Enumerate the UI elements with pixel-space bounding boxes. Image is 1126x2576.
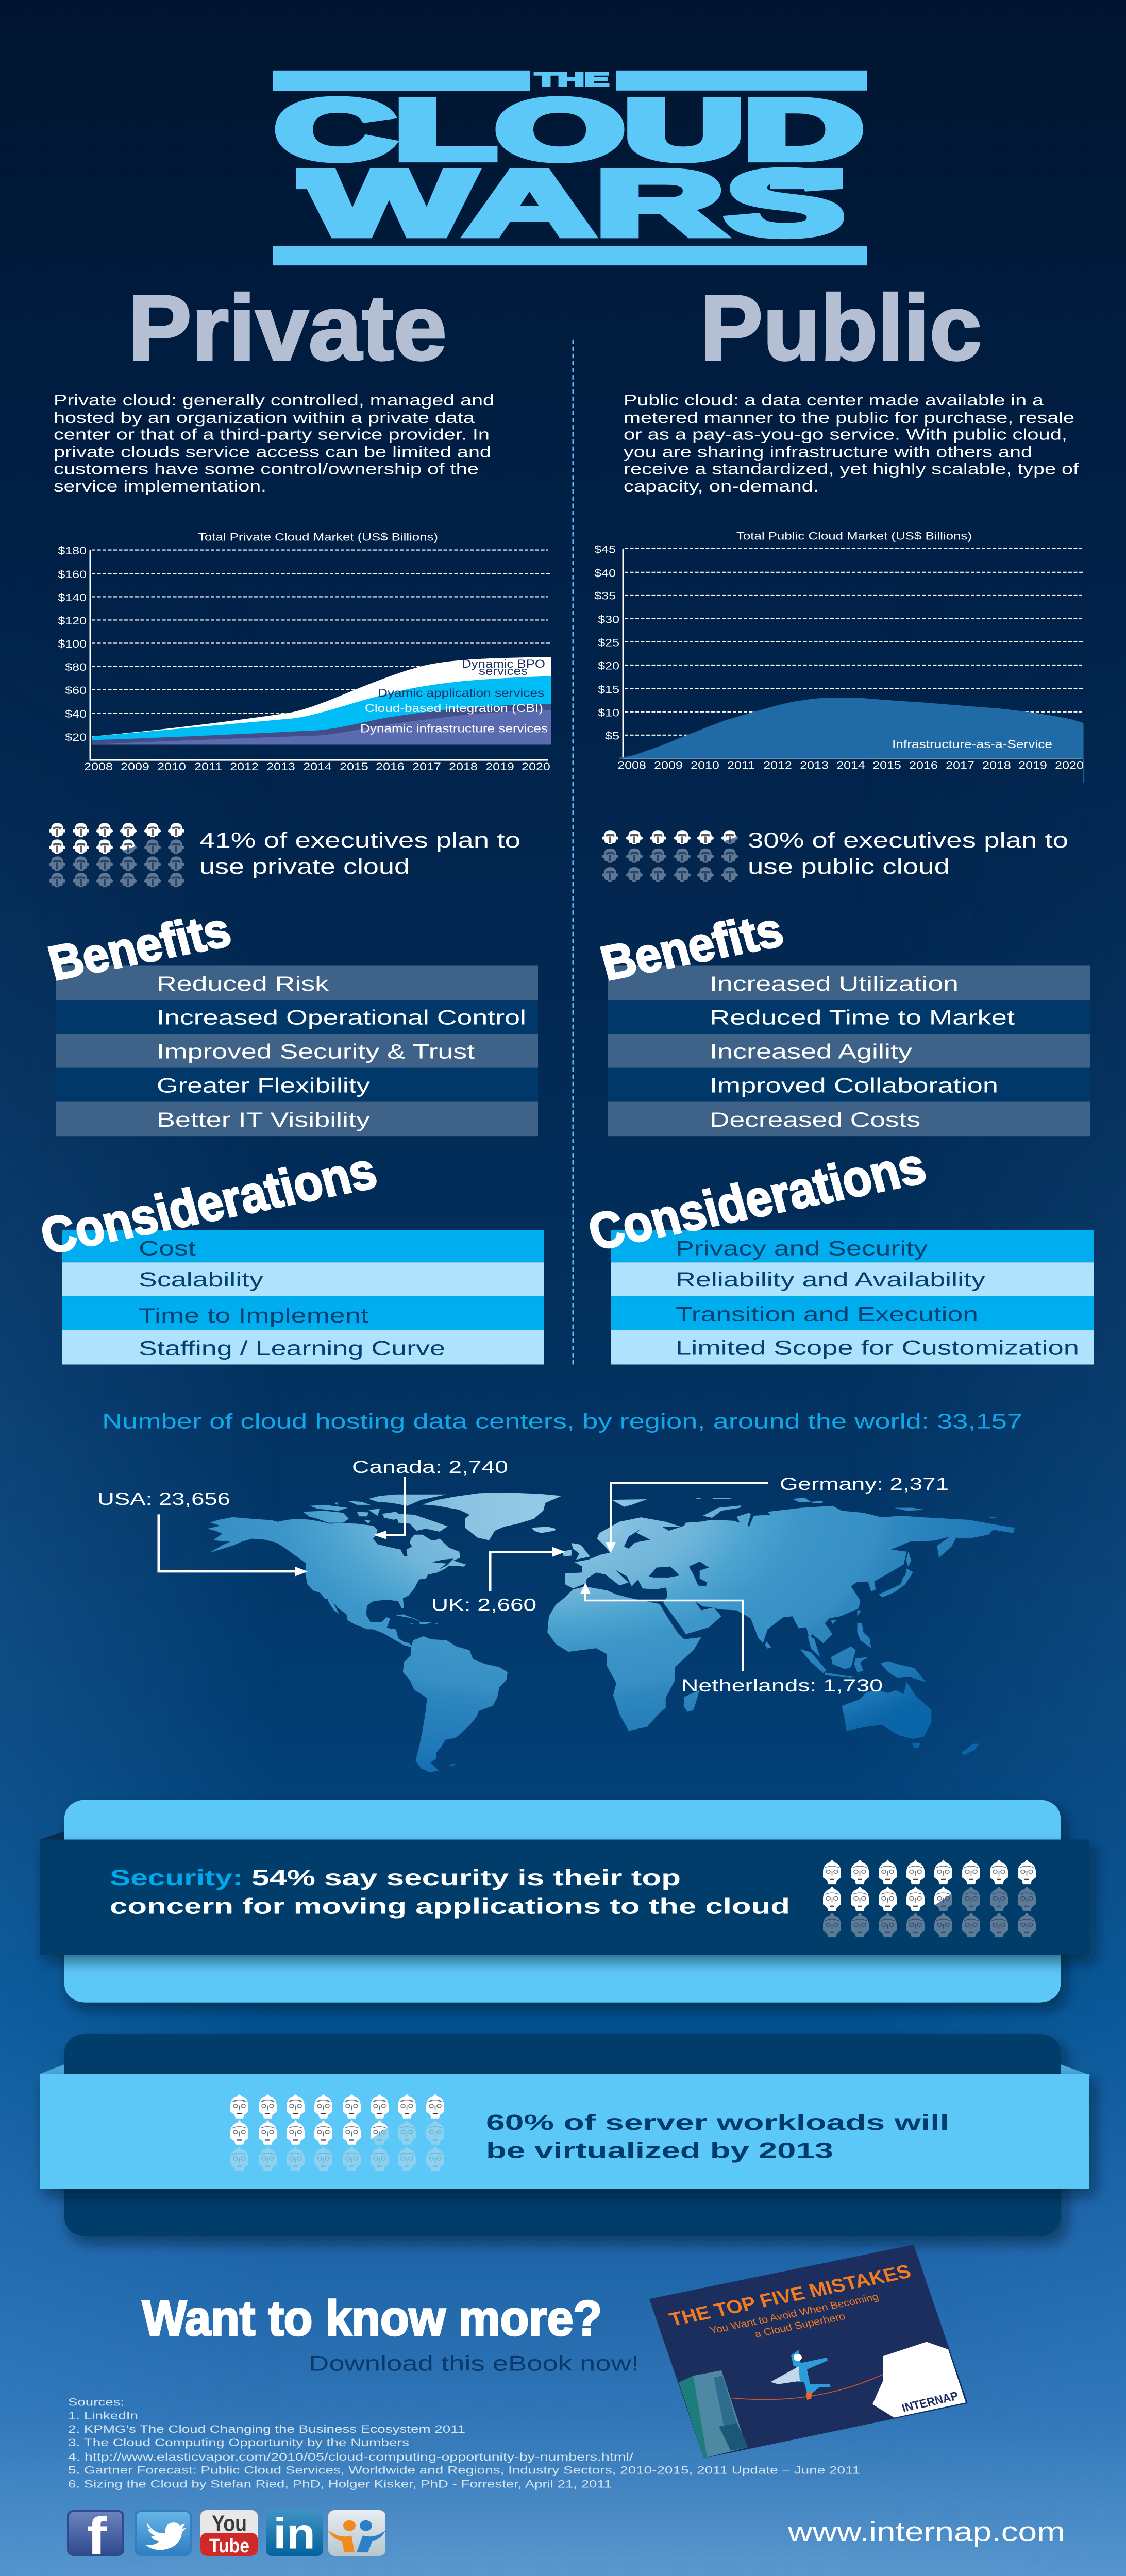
callout: Netherlands: Netherlands: 1,730 xyxy=(681,1675,883,1696)
chart: total public cloud market: 2017 xyxy=(946,759,974,771)
chart: total private cloud market: $140 xyxy=(58,591,87,604)
chart: total public cloud market: $40 xyxy=(594,567,616,579)
callout: Germany: Germany: 2,371 xyxy=(780,1473,949,1494)
chart: total public cloud market: 2015 xyxy=(872,759,901,771)
heading: public considerations: Considerations xyxy=(582,1137,932,1261)
chart: total public cloud market: 2014 xyxy=(836,759,865,771)
chart: total public cloud market xyxy=(594,530,1084,783)
panel: security xyxy=(40,1800,1089,2003)
text: internap brand: INTERNAP xyxy=(900,2389,960,2415)
text block: private cloud definition: service implementation. xyxy=(54,477,266,495)
chart: total private cloud market: $100 xyxy=(58,638,87,650)
stat: 30 percent public cloud: use public cloud xyxy=(748,854,950,878)
panel: public considerations: Limited Scope for Customization xyxy=(676,1336,1079,1360)
text block: public cloud definition: metered manner to the public for purchase, resale xyxy=(624,409,1074,426)
chart: total private cloud market: Total Private Cloud Market (US$ Billions) xyxy=(198,531,438,543)
chart: total public cloud market: $15 xyxy=(598,683,619,696)
chart: total private cloud market: $20 xyxy=(65,731,87,743)
map: eurasia, africa and australia xyxy=(547,1498,1015,1755)
icon: linkedin: in xyxy=(273,2509,315,2558)
icon grid: 54 percent droid heads xyxy=(823,1860,1036,1937)
title logo: CLOUD xyxy=(275,82,863,177)
text block: public cloud definition: you are sharing infrastructure with others and xyxy=(624,443,1032,461)
chart: total public cloud market: 2010 xyxy=(691,759,719,771)
chart: total private cloud market: 2013 xyxy=(266,760,295,773)
stat: 41 percent private cloud: use private cloud xyxy=(199,854,410,878)
text block: private cloud definition: hosted by an organization within a private data xyxy=(54,409,475,426)
text block: public cloud definition: or as a pay-as-you-go service. With public cloud, xyxy=(624,426,1067,443)
text block: private cloud definition: customers have some control/ownership of the xyxy=(54,460,479,478)
chart: total private cloud market: Dyamic application services xyxy=(378,687,544,700)
heading: private considerations: Considerations xyxy=(35,1141,382,1265)
text: virtualization statistic xyxy=(486,2110,949,2163)
chart: total private cloud market: $60 xyxy=(65,684,87,697)
chart: total public cloud market: Total Public Cloud Market (US$ Billions) xyxy=(736,530,972,542)
text block: sources xyxy=(68,2396,860,2490)
text block: sources: 6. Sizing the Cloud by Stefan Ried, PhD, Holger Kisker, PhD - Forrester, April 21, 2011 xyxy=(68,2478,612,2490)
text block: private cloud definition xyxy=(54,391,494,495)
panel: private benefits: Improved Security & Trust xyxy=(157,1040,475,1063)
chart: total public cloud market: 2018 xyxy=(982,759,1011,771)
chart: total private cloud market: 2016 xyxy=(376,760,405,773)
icon grid: 41 percent helmets xyxy=(49,823,184,887)
chart: total private cloud market: Dynamic infrastructure services xyxy=(360,722,548,735)
panel: private benefits: Increased Operational Control xyxy=(157,1007,526,1029)
panel: virtualization xyxy=(40,2034,1090,2236)
text block: public cloud definition: receive a standardized, yet highly scalable, type of xyxy=(624,460,1079,478)
callout: Netherlands xyxy=(580,1583,883,1696)
panel: public considerations xyxy=(611,1230,1094,1364)
chart: total public cloud market: $35 xyxy=(594,589,616,602)
chart: total public cloud market: $45 xyxy=(594,543,616,555)
text block: public cloud definition: capacity, on-demand. xyxy=(624,477,819,495)
heading: private benefits: Benefits xyxy=(43,903,236,991)
text block: sources: 4. http://www.elasticvapor.com/2010/05/cloud-computing-opportunity-by-numbers.html/ xyxy=(68,2450,634,2463)
chart: total public cloud market: $20 xyxy=(598,659,619,672)
chart: total public cloud market: Infrastructure-as-a-Service xyxy=(892,738,1052,751)
chart: total private cloud market: $180 xyxy=(58,545,87,557)
panel: public benefits: Increased Agility xyxy=(710,1040,913,1063)
icon: facebook xyxy=(67,2507,124,2566)
chart: total public cloud market: 2009 xyxy=(654,759,683,771)
map: americas and greenland xyxy=(207,1493,562,1773)
heading: public benefits: Benefits xyxy=(595,903,788,991)
callout: UK: UK: 2,660 xyxy=(431,1595,536,1615)
icon grid: 30 percent helmets xyxy=(602,830,738,882)
icon grid: 60 percent droid heads xyxy=(230,2094,444,2171)
panel: private benefits: Better IT Visibility xyxy=(157,1109,371,1131)
text: security statistic: concern for moving applications to the cloud xyxy=(110,1894,790,1919)
stat: 41 percent private cloud: 41% of executives plan to xyxy=(199,828,520,852)
panel: private considerations: Cost xyxy=(139,1237,196,1260)
text: ebook title: a Cloud Superhero xyxy=(753,2311,847,2340)
heading: want to know more: Want to know more? xyxy=(142,2291,602,2346)
callout: USA xyxy=(97,1489,308,1577)
callout: Canada: Canada: 2,740 xyxy=(352,1456,508,1477)
panel: private considerations xyxy=(62,1230,544,1364)
text block: public cloud definition xyxy=(624,391,1079,495)
text: ebook title xyxy=(667,2261,922,2355)
stat: 41 percent private cloud xyxy=(199,828,520,878)
chart: total public cloud market: 2016 xyxy=(909,759,938,771)
title logo: WARS xyxy=(304,151,845,255)
panel: private considerations: Scalability xyxy=(139,1268,264,1291)
text: ebook title: You Want to Avoid When Becoming xyxy=(708,2291,880,2336)
panel: public benefits: Improved Collaboration xyxy=(710,1074,998,1097)
text block: sources: 3. The Cloud Computing Opportunity by the Numbers xyxy=(68,2436,409,2449)
text block: private cloud definition: center or that of a third-party service provider. In xyxy=(54,426,490,443)
panel: private benefits: Reduced Risk xyxy=(157,973,329,995)
chart: total private cloud market: 2019 xyxy=(485,760,514,773)
world map xyxy=(207,1493,1015,1773)
chart: total private cloud market: $160 xyxy=(58,568,87,581)
chart: total public cloud market: $25 xyxy=(598,636,619,649)
icon: youtube: Tube xyxy=(209,2535,249,2556)
text block: private cloud definition: Private cloud: generally controlled, managed and xyxy=(54,391,494,409)
chart: total public cloud market: 2008 xyxy=(617,759,646,771)
panel: private considerations: Staffing / Learning Curve xyxy=(139,1337,445,1360)
chart: total private cloud market: 2020 xyxy=(522,760,550,773)
text block: private cloud definition: private clouds service access can be limited and xyxy=(54,443,491,461)
text: download ebook: Download this eBook now! xyxy=(309,2351,639,2376)
panel: public benefits: Reduced Time to Market xyxy=(710,1007,1015,1029)
panel: private benefits xyxy=(56,965,538,1136)
chart: total public cloud market: $5 xyxy=(605,730,619,742)
chart: total private cloud market: services xyxy=(479,665,528,678)
panel: private benefits: Greater Flexibility xyxy=(157,1074,371,1097)
callout: USA: USA: 23,656 xyxy=(97,1489,230,1509)
panel: public considerations: Privacy and Security xyxy=(676,1237,928,1260)
chart: total private cloud market: 2011 xyxy=(194,760,222,773)
text: security statistic: 54% say security is their top xyxy=(251,1866,681,1890)
callout: Canada xyxy=(352,1456,508,1539)
title logo: THE xyxy=(535,69,609,90)
text: virtualization statistic: 60% of server workloads will xyxy=(486,2110,949,2134)
chart: total private cloud market: 2015 xyxy=(340,760,368,773)
chart: total private cloud market: 2008 xyxy=(84,760,113,773)
ebook cover xyxy=(649,2245,968,2458)
chart: total private cloud market xyxy=(58,531,551,773)
chart: total private cloud market: 2012 xyxy=(230,760,259,773)
text: website url: www.internap.com xyxy=(787,2517,1065,2548)
heading: data centers: Number of cloud hosting data centers, by region, around the world: 33,157 xyxy=(102,1410,1022,1433)
icon: people logo xyxy=(328,2510,385,2556)
chart: total private cloud market: 2018 xyxy=(449,760,478,773)
icon: youtube xyxy=(200,2510,258,2556)
chart: total public cloud market: $10 xyxy=(598,706,619,719)
text block: sources: 5. Gartner Forecast: Public Cloud Services, Worldwide and Regions, Industry Sectors, 2010-2015, 2011 Update – June 2011 xyxy=(68,2464,860,2476)
chart: total public cloud market: 2011 xyxy=(727,759,755,771)
chart: total private cloud market: 2010 xyxy=(157,760,186,773)
text: ebook title: THE TOP FIVE MISTAKES xyxy=(667,2261,914,2330)
title logo xyxy=(273,69,867,265)
text block: public cloud definition: Public cloud: a data center made available in a xyxy=(624,391,1044,409)
panel: public benefits xyxy=(608,965,1090,1136)
chart: total public cloud market: 2020 xyxy=(1055,759,1084,771)
heading: Private: Private xyxy=(128,277,447,380)
heading: Public: Public xyxy=(700,277,982,380)
stat: 30 percent public cloud: 30% of executives plan to xyxy=(748,828,1068,852)
chart: total private cloud market: 2014 xyxy=(303,760,332,773)
chart: total private cloud market: 2009 xyxy=(121,760,149,773)
text: virtualization statistic: be virtualized by 2013 xyxy=(486,2139,833,2163)
chart: total private cloud market: $40 xyxy=(65,708,87,720)
chart: total private cloud market: $120 xyxy=(58,615,87,627)
panel: public benefits: Decreased Costs xyxy=(710,1109,920,1131)
icon: twitter xyxy=(135,2510,192,2556)
text block: sources: 2. KPMG's The Cloud Changing the Business Ecosystem 2011 xyxy=(68,2423,465,2435)
text block: sources: 1. LinkedIn xyxy=(68,2410,138,2422)
chart: total private cloud market: 2017 xyxy=(412,760,441,773)
chart: total private cloud market: Cloud-based integration (CBI) xyxy=(365,702,543,715)
panel: public considerations: Transition and Execution xyxy=(676,1303,978,1326)
text: security statistic: Security: xyxy=(110,1866,243,1890)
icon: facebook: f xyxy=(87,2507,107,2566)
chart: total private cloud market: $80 xyxy=(65,661,87,673)
chart: total public cloud market: 2013 xyxy=(800,759,829,771)
panel: public benefits: Increased Utilization xyxy=(710,973,959,995)
chart: total public cloud market: 2012 xyxy=(763,759,792,771)
panel: public considerations: Reliability and Availability xyxy=(676,1268,986,1291)
panel: private considerations: Time to Implement xyxy=(139,1304,368,1327)
illustration: superhero xyxy=(770,2350,831,2400)
icon: youtube: You xyxy=(212,2511,247,2536)
text block: sources: Sources: xyxy=(68,2396,124,2408)
chart: total public cloud market: 2019 xyxy=(1018,759,1047,771)
chart: total public cloud market: $30 xyxy=(598,613,619,625)
chart: total private cloud market: Dynamic BPO xyxy=(462,658,545,671)
callout: UK xyxy=(431,1547,565,1615)
text: security statistic xyxy=(110,1866,790,1919)
callout: Germany xyxy=(606,1473,949,1553)
stat: 30 percent public cloud xyxy=(748,828,1068,878)
